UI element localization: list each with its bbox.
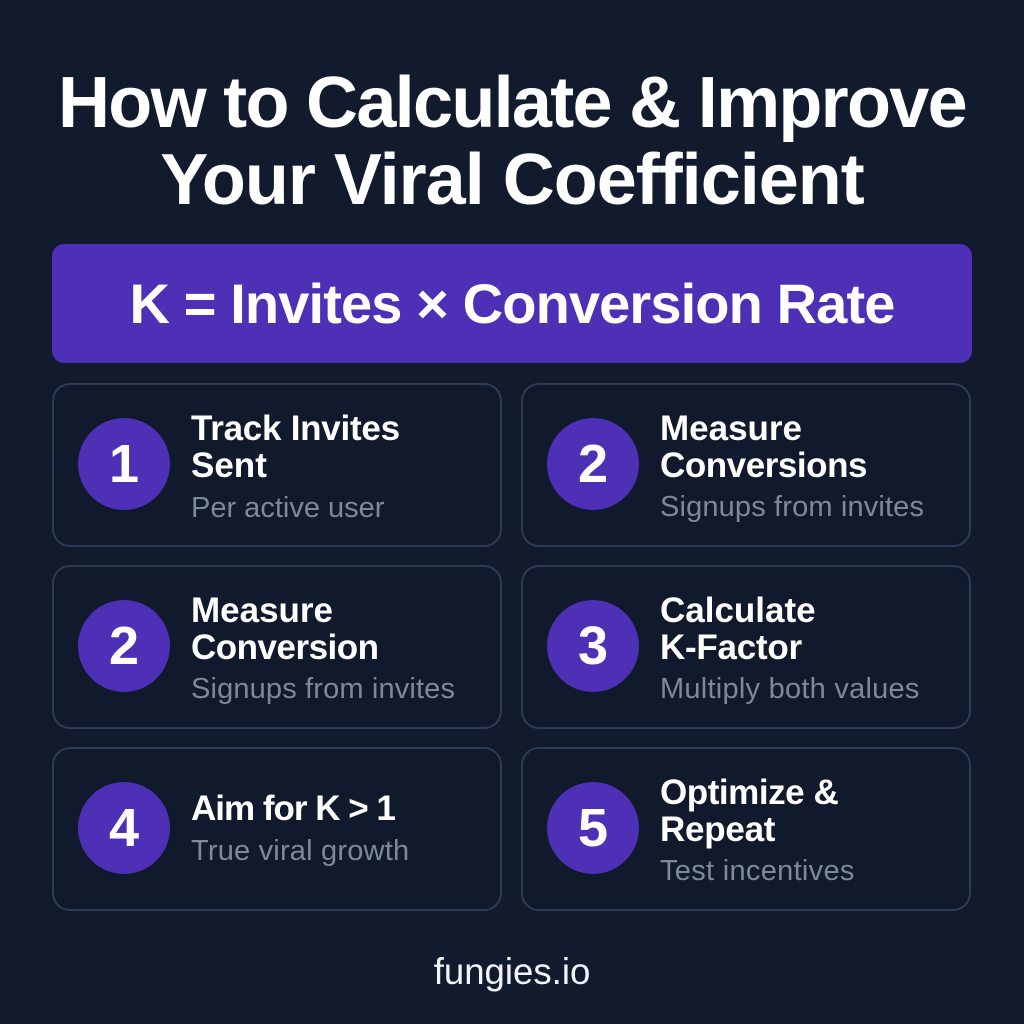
heading: Sent [191, 446, 267, 484]
card: optimize and repeat [521, 747, 971, 911]
footer brand: fungies.io [434, 951, 590, 992]
subtext: Signups from invites [191, 673, 455, 705]
number 4: 4 [109, 798, 139, 858]
heading: K-Factor [660, 628, 802, 666]
number 5 [547, 782, 639, 874]
heading: Aim for K > 1 [191, 789, 395, 828]
subtext: Multiply both values [660, 673, 920, 705]
heading: Conversion [191, 628, 379, 666]
heading [191, 590, 379, 666]
heading: Conversions [660, 446, 867, 484]
card: measure conversions [521, 383, 971, 547]
number 2: 2 [578, 434, 608, 494]
formula banner [52, 244, 972, 363]
subtext: True viral growth [191, 835, 409, 867]
title: Your Viral Coefficient [160, 140, 864, 220]
number 4 [78, 782, 170, 874]
number 2: 2 [109, 616, 139, 676]
heading: Track Invites [191, 408, 400, 448]
card: calculate k-factor [521, 565, 971, 729]
subtext: Test incentives [660, 855, 855, 887]
number 1 [78, 418, 170, 510]
heading: Optimize & [660, 772, 838, 812]
number 1: 1 [109, 434, 139, 494]
card: aim for k>1 [52, 747, 502, 911]
number 3 [547, 600, 639, 692]
heading: Measure [660, 408, 802, 448]
card: measure conversion [52, 565, 502, 729]
title [58, 62, 966, 220]
formula banner: K = Invites × Conversion Rate [130, 272, 894, 335]
number 5: 5 [578, 798, 608, 858]
card: track invites [52, 383, 502, 547]
number 2 [547, 418, 639, 510]
heading: Measure [191, 590, 333, 630]
subtext: Signups from invites [660, 491, 924, 523]
heading [660, 408, 867, 484]
title: How to Calculate & Improve [58, 62, 966, 142]
heading [660, 772, 838, 848]
heading [191, 408, 400, 484]
heading [660, 590, 816, 666]
number 3: 3 [578, 616, 608, 676]
heading: Calculate [660, 590, 816, 630]
heading: Repeat [660, 810, 775, 848]
number 2 [78, 600, 170, 692]
subtext: Per active user [191, 492, 384, 524]
